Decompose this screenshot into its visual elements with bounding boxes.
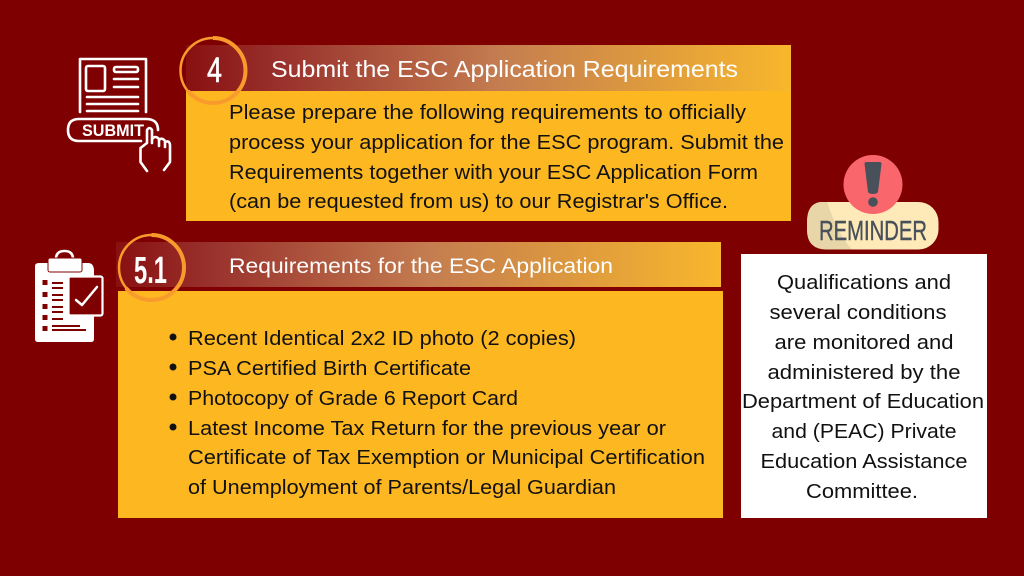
text block: requirements bullets: Photocopy of Grade 6 Report Card [188,387,518,410]
icon: submit form [68,59,170,171]
text block: requirements bullets [170,327,705,499]
icon: clipboard checklist [35,251,102,342]
text block: step 4 description: Requirements together with your ESC Application Form [229,161,758,184]
text block: reminder note: administered by the [768,361,960,384]
text block: reminder note [742,271,984,503]
header bar: step 5.1 [116,242,721,287]
text block: reminder note: Department of Education [742,390,984,413]
text block: step 4 description: Please prepare the following requirements to officially [229,101,747,124]
text block: reminder note: Committee. [806,480,918,503]
heading: step 4: Submit the ESC Application Requirements [271,56,738,82]
text block: reminder note: Qualifications and [777,271,951,294]
badge: number 5.1 [119,235,184,300]
text block: step 4 description: (can be requested from us) to our Registrar's Office. [229,190,728,213]
badge: number 5.1: 5.1 [134,250,167,292]
text block: requirements bullets: Certificate of Tax Exemption or Municipal Certification [188,446,705,469]
text block: requirements bullets: Latest Income Tax Return for the previous year or [188,417,666,440]
badge: number 4 [180,38,246,103]
badge: number 4: 4 [207,51,222,90]
panel: requirements list [118,291,723,518]
text block: reminder note: Education Assistance [760,450,968,473]
icon: reminder badge [807,155,938,250]
header bar: step 4 [186,45,791,91]
text block: step 4 description [229,101,784,213]
text block: requirements bullets: of Unemployment of Parents/Legal Guardian [188,476,616,499]
heading: step 5.1: Requirements for the ESC Application [229,254,613,278]
text block: reminder note: and (PEAC) Private [772,420,956,443]
text block: reminder note: several conditions [770,301,946,324]
text block: requirements bullets: PSA Certified Birth Certificate [188,357,471,380]
icon: reminder badge: REMINDER [819,215,927,246]
panel: step 4 body [186,91,791,221]
text block: reminder note: are monitored and [774,331,954,354]
text block: step 4 description: process your application for the ESC program. Submit the [229,131,784,154]
icon: submit form: SUBMIT [82,122,144,140]
panel: reminder note [741,254,987,518]
text block: requirements bullets: Recent Identical 2x2 ID photo (2 copies) [188,327,576,350]
